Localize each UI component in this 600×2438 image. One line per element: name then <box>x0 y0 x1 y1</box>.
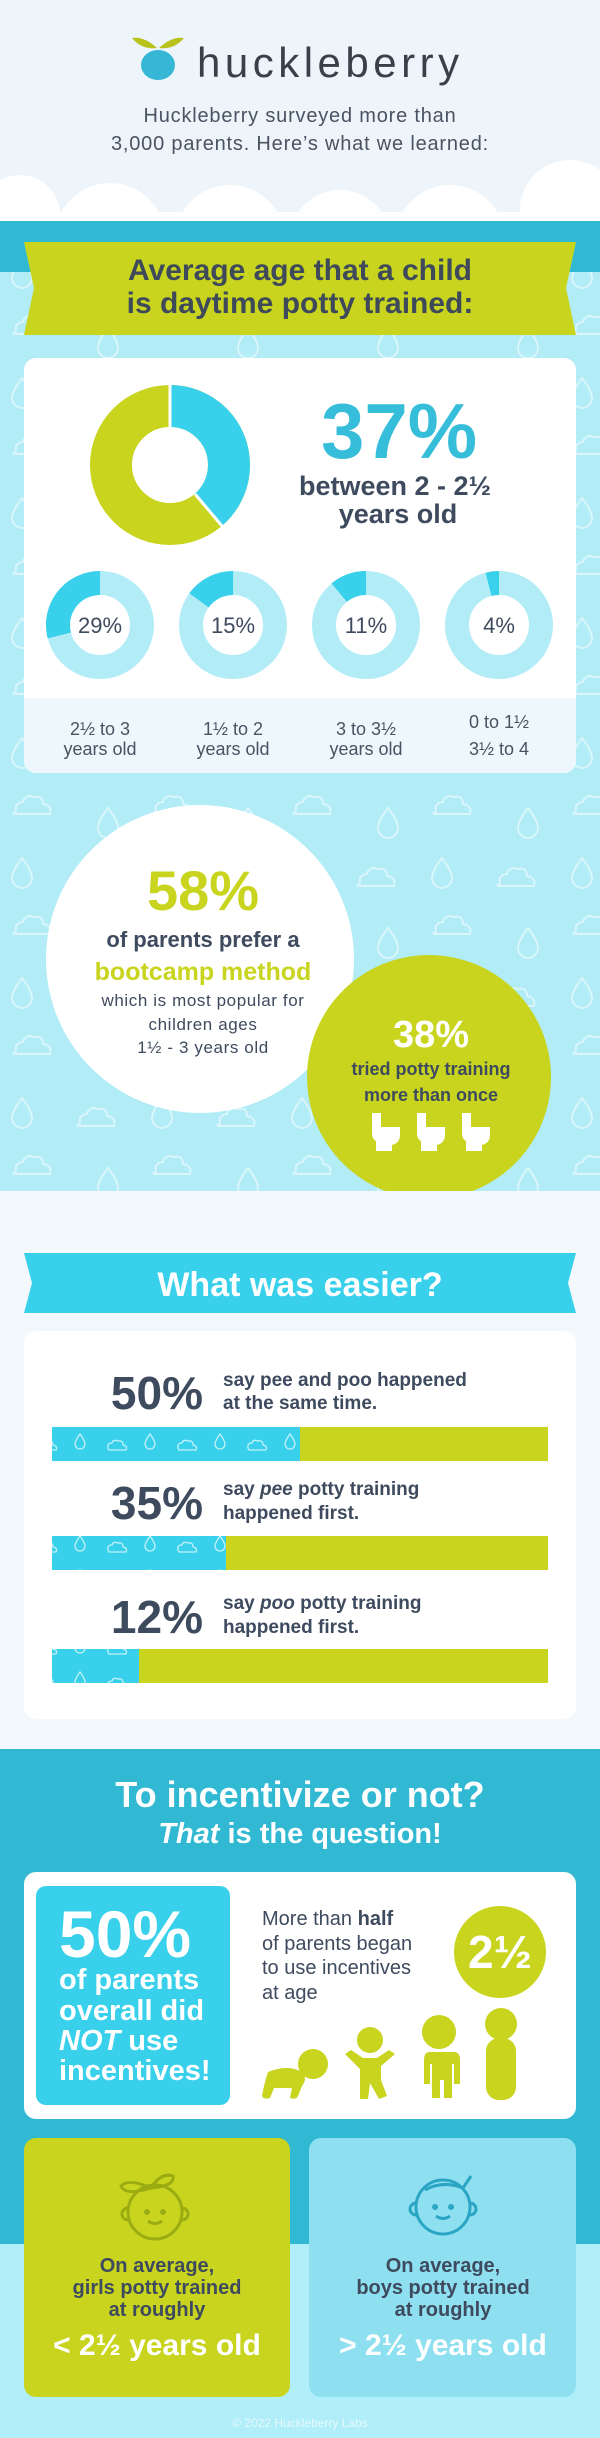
stat row: 35%: happened first. <box>223 1503 359 1524</box>
text: more than half <box>262 1908 412 2004</box>
small donut: 29% <box>49 574 151 676</box>
stat row: 12% <box>52 1591 548 1683</box>
icon: toilets <box>372 1113 490 1151</box>
callout: 38% tried more than once: 38% <box>393 1014 469 1056</box>
callout: 58% bootcamp: of parents prefer a <box>106 927 300 952</box>
small donut: 15% <box>174 566 292 684</box>
stat: 37%: 37% <box>321 387 477 475</box>
small donut: 4%: 4% <box>483 613 515 638</box>
small donut: 29%: 29% <box>78 613 122 638</box>
stat box: 50% did not use incentives: NOT use <box>59 2025 178 2057</box>
age labels <box>63 712 529 759</box>
text: more than half: of parents began <box>262 1933 412 1955</box>
text: more than half: at age <box>262 1982 318 2004</box>
panel: age card <box>24 358 576 773</box>
panel: girls: < 2½ years old <box>53 2329 261 2362</box>
stat row: 50%: say pee and poo happened <box>223 1370 467 1391</box>
icon: girl face <box>121 2175 188 2239</box>
heading: incentivize: That is the question! <box>158 1818 442 1850</box>
panel: easier card <box>24 1331 576 1719</box>
age labels: 3 to 3½ <box>336 719 396 739</box>
stat row: 12%: say poo potty training <box>223 1593 421 1614</box>
callout: 58% bootcamp: bootcamp method <box>95 958 311 986</box>
stat: 37%: between 2 - 2½ <box>299 471 491 501</box>
panel: girls <box>24 2138 290 2397</box>
badge: 2½: 2½ <box>468 1926 532 1978</box>
intro text: Huckleberry surveyed more than <box>143 105 457 127</box>
banner: what was easier: What was easier? <box>157 1266 443 1304</box>
stat: 37%: years old <box>339 499 457 529</box>
callout: 58% bootcamp: 1½ - 3 years old <box>137 1038 269 1057</box>
age labels: 1½ to 2 <box>203 719 263 739</box>
text: more than half: More than half <box>262 1908 394 1930</box>
stat row: 50% <box>52 1367 548 1461</box>
panel: girls: On average, <box>100 2255 214 2277</box>
footer: copyright: © 2022 Huckleberry Labs <box>232 2416 368 2430</box>
banner: average age: is daytime potty trained: <box>127 287 473 320</box>
callout: 58% bootcamp: which is most popular for <box>100 991 305 1010</box>
icon: boy face <box>410 2176 476 2234</box>
banner: average age <box>24 242 576 335</box>
age labels: years old <box>196 739 270 759</box>
panel: boys: On average, <box>386 2255 500 2277</box>
small donut: 11% <box>307 566 425 684</box>
stat row: 50%: 50% <box>111 1367 203 1419</box>
header background <box>0 0 600 295</box>
banner: what was easier <box>24 1253 576 1313</box>
stat box: 50% did not use incentives <box>36 1886 230 2105</box>
stat row: 35%: say pee potty training <box>223 1479 419 1500</box>
icon: berry with leaves <box>132 38 184 80</box>
small donut: 4% <box>448 574 550 676</box>
section 2 background <box>0 1191 600 1749</box>
panel: boys: at roughly <box>395 2299 492 2321</box>
intro text <box>111 105 489 155</box>
panel: girls: at roughly <box>109 2299 206 2321</box>
callout: 58% bootcamp: 58% <box>147 859 259 922</box>
stat box: 50% did not use incentives: of parents <box>59 1964 199 1996</box>
panel: incentives card <box>24 1872 576 2119</box>
banner: average age: Average age that a child <box>128 254 472 287</box>
callout: 38% tried more than once: tried potty training <box>352 1059 510 1079</box>
callout: 58% bootcamp <box>46 805 354 1113</box>
section 3 background <box>0 1749 600 2438</box>
heading: incentivize: To incentivize or not? <box>115 1774 485 1815</box>
wordmark: huckleberry <box>197 39 464 86</box>
stat row: 35% <box>52 1477 548 1570</box>
badge: 2½ <box>454 1906 546 1998</box>
panel: boys <box>309 2138 576 2397</box>
panel: boys: > 2½ years old <box>339 2329 547 2362</box>
callout: 58% bootcamp: children ages <box>149 1015 257 1034</box>
text: more than half: to use incentives <box>262 1957 411 1979</box>
icon: growth figures <box>262 2008 517 2100</box>
age labels: 3½ to 4 <box>469 739 529 759</box>
age labels: 0 to 1½ <box>469 712 529 732</box>
callout: 38% tried more than once <box>307 955 551 1199</box>
section 1 background <box>0 221 600 1191</box>
stat row: 50%: at the same time. <box>223 1393 377 1414</box>
stat row: 12%: happened first. <box>223 1617 359 1638</box>
small donut: 15%: 15% <box>211 613 255 638</box>
big donut chart <box>111 384 229 526</box>
age labels: years old <box>329 739 403 759</box>
stat row: 35%: 35% <box>111 1477 203 1529</box>
stat box: 50% did not use incentives: overall did <box>59 1995 204 2027</box>
stat row: 12%: 12% <box>111 1591 203 1643</box>
panel: boys: boys potty trained <box>356 2277 530 2299</box>
heading: incentivize <box>115 1774 485 1850</box>
small donut: 11%: 11% <box>345 613 387 638</box>
logo <box>132 38 464 86</box>
panel: girls: girls potty trained <box>73 2277 241 2299</box>
stat box: 50% did not use incentives: 50% <box>59 1897 191 1971</box>
callout: 38% tried more than once: more than once <box>364 1085 498 1105</box>
stat box: 50% did not use incentives: incentives! <box>59 2055 210 2087</box>
age labels: years old <box>63 739 137 759</box>
stat: 37% <box>299 387 491 529</box>
age labels: 2½ to 3 <box>70 719 130 739</box>
intro text: 3,000 parents. Here’s what we learned: <box>111 133 489 155</box>
